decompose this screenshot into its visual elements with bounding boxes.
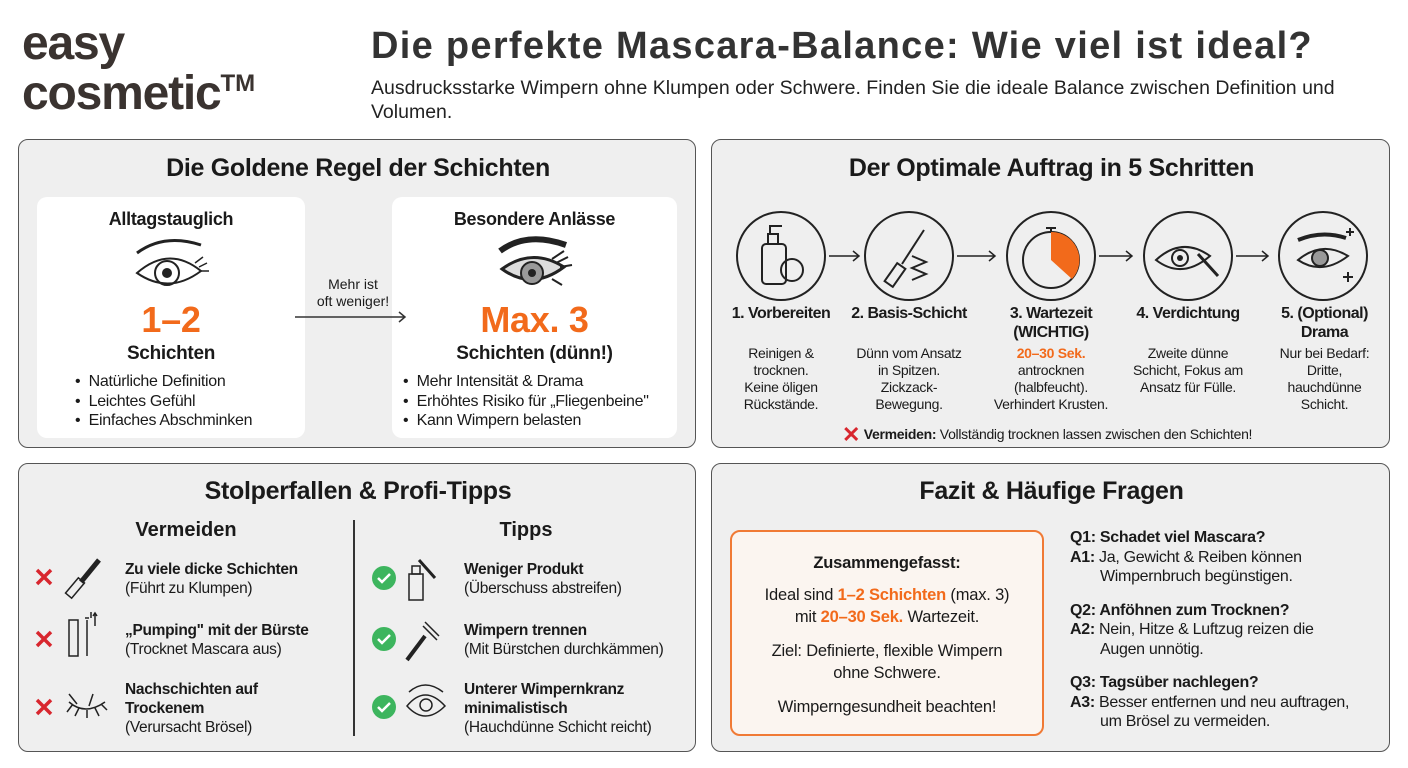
step 1 — [732, 305, 830, 412]
summary box: Wimperngesundheit beachten! — [778, 698, 996, 716]
panel: Stolperfallen: Tipps — [500, 519, 552, 541]
panel: Stolperfallen — [18, 463, 696, 752]
step 5: Nur bei Bedarf: — [1280, 345, 1369, 361]
heading: Der Optimale Auftrag in 5 Schritten — [849, 154, 1254, 182]
step 4: Ansatz für Fülle. — [1140, 379, 1236, 395]
step 2: in Spitzen. — [878, 362, 940, 378]
number 1-2: 1–2 — [141, 299, 201, 340]
avoid list: (Verursacht Brösel) — [125, 719, 252, 736]
arrow: mehr ist oft weniger: oft weniger! — [317, 293, 389, 309]
list — [403, 373, 649, 429]
card: besondere anlaesse: Besondere Anlässe — [454, 209, 615, 229]
summary box: Ziel: Definierte, flexible Wimpern — [772, 642, 1002, 660]
tips list: Weniger Produkt — [464, 561, 583, 578]
icon: natural eye — [135, 239, 209, 286]
step 5: Schicht. — [1301, 396, 1348, 412]
step 3: 3. Wartezeit — [1010, 305, 1092, 322]
card: alltagstauglich: Alltagstauglich — [109, 209, 233, 229]
icon: dramatic eye — [498, 236, 572, 286]
faq: Q1: Schadet viel Mascara? — [1070, 529, 1265, 546]
summary box: Zusammengefasst: — [813, 554, 961, 572]
step 5: hauchdünne — [1287, 379, 1362, 395]
list: • Erhöhtes Risiko für „Fliegenbeine" — [403, 392, 649, 410]
tips list: (Mit Bürstchen durchkämmen) — [464, 641, 664, 658]
step 5: Drama — [1301, 324, 1348, 341]
summary box: mit 20–30 Sek. Wartezeit. — [795, 608, 979, 626]
summary box — [730, 530, 1044, 736]
panel: Fazit — [711, 463, 1390, 752]
step 3: (WICHTIG) — [1013, 324, 1089, 341]
step 3: Verhindert Krusten. — [994, 396, 1108, 412]
step 4: 4. Verdichtung — [1136, 305, 1240, 322]
step 3: 20–30 Sek. — [1017, 345, 1085, 361]
title: Die perfekte Mascara-Balance: Wie viel ist ideal? — [371, 25, 1313, 67]
card: alltagstauglich — [37, 197, 305, 438]
avoid list: (Trocknet Mascara aus) — [125, 641, 281, 658]
step 1: Reinigen & — [748, 345, 814, 361]
step 1: Rückstände. — [744, 396, 818, 412]
logo: easy — [22, 17, 124, 70]
avoid list: „Pumping" mit der Bürste — [125, 622, 309, 639]
card: alltagstauglich: Schichten — [127, 343, 215, 364]
step 4: Zweite dünne — [1148, 345, 1228, 361]
step 5 — [1280, 305, 1369, 412]
card: besondere anlaesse: Schichten (dünn!) — [456, 343, 613, 364]
arrow: mehr ist oft weniger — [295, 276, 406, 322]
arrow: mehr ist oft weniger: Mehr ist — [328, 276, 378, 292]
summary box: Ideal sind 1–2 Schichten (max. 3) — [765, 586, 1009, 604]
step 3: antrocknen — [1018, 362, 1084, 378]
list: • Kann Wimpern belasten — [403, 412, 581, 429]
step 2: Bewegung. — [875, 396, 943, 412]
faq: A3: Besser entfernen und neu auftragen, — [1070, 694, 1349, 710]
step 3 — [994, 305, 1108, 412]
step 2 — [851, 305, 968, 412]
step 2: Dünn vom Ansatz — [856, 345, 962, 361]
step 1: trocknen. — [754, 362, 808, 378]
step 4: Schicht, Fokus am — [1133, 362, 1243, 378]
step 2: 2. Basis-Schicht — [851, 305, 967, 322]
avoid list: (Führt zu Klumpen) — [125, 580, 252, 597]
faq: um Brösel zu vermeiden. — [1100, 713, 1270, 730]
step 1: 1. Vorbereiten — [732, 305, 830, 322]
panel: Stolperfallen: Vermeiden — [135, 519, 237, 541]
faq: Augen unnötig. — [1100, 640, 1203, 658]
avoid list: Nachschichten auf — [125, 681, 258, 698]
list: • Einfaches Abschminken — [75, 412, 252, 429]
tips list: Unterer Wimpernkranz — [464, 681, 624, 698]
step 2: Zickzack- — [881, 379, 937, 395]
faq: Wimpernbruch begünstigen. — [1100, 568, 1293, 585]
subtitle: Ausdrucksstarke Wimpern ohne Klumpen oder Schwere. Finden Sie die ideale Balance zwischen Definition und Volumen. — [371, 77, 1335, 123]
list — [75, 373, 252, 429]
list: • Leichtes Gefühl — [75, 392, 195, 410]
faq: Q2: Anföhnen zum Trocknen? — [1070, 602, 1289, 618]
tips list: (Überschuss abstreifen) — [464, 580, 622, 597]
faq: Q3: Tagsüber nachlegen? — [1070, 674, 1258, 691]
step 5: Dritte, — [1307, 362, 1342, 378]
logo: cosmeticTM — [22, 67, 255, 120]
avoid list — [36, 558, 309, 736]
tips list: minimalistisch — [464, 700, 567, 717]
avoid list: Trockenem — [125, 700, 204, 717]
avoid list: Zu viele dicke Schichten — [125, 561, 298, 578]
heading: Fazit & Häufige Fragen — [919, 477, 1184, 505]
faq — [1070, 529, 1349, 730]
list: • Mehr Intensität & Drama — [403, 373, 583, 390]
panel: 5 Schritte — [711, 139, 1390, 448]
tips list: Wimpern trennen — [464, 622, 587, 639]
faq: A1: Ja, Gewicht & Reiben können — [1070, 548, 1302, 566]
heading: Die Goldene Regel der Schichten — [166, 154, 550, 182]
step 3: (halbfeucht). — [1014, 379, 1088, 395]
step 5: 5. (Optional) — [1281, 305, 1368, 322]
number max 3: Max. 3 — [480, 299, 589, 340]
warning: ✕ Vermeiden: Vollständig trocknen lassen zwischen den Schichten! — [842, 422, 1252, 447]
step 4 — [1133, 305, 1243, 395]
card: besondere anlaesse — [392, 197, 677, 438]
tips list — [372, 559, 664, 736]
step icons row — [736, 211, 1368, 301]
tips list: (Hauchdünne Schicht reicht) — [464, 719, 651, 736]
panel: Goldene Regel — [18, 139, 696, 448]
faq: A2: Nein, Hitze & Luftzug reizen die — [1070, 621, 1314, 638]
logo — [22, 17, 255, 120]
heading: Stolperfallen & Profi-Tipps — [205, 477, 511, 505]
list: • Natürliche Definition — [75, 373, 225, 390]
summary box: ohne Schwere. — [833, 664, 941, 682]
step 1: Keine öligen — [744, 379, 818, 395]
